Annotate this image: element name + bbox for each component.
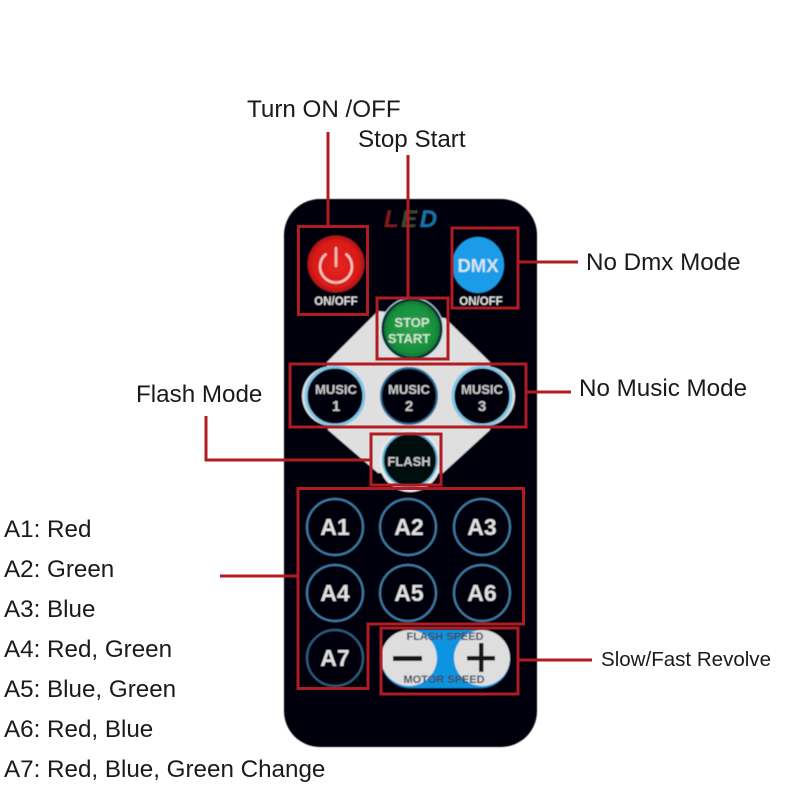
LED logo: LED — [384, 206, 440, 233]
A1 — [307, 499, 363, 555]
A4: A4 — [320, 580, 350, 606]
label: no music mode: No Music Mode — [579, 375, 747, 402]
flash button: FLASH — [387, 454, 431, 469]
A7 — [307, 630, 363, 686]
label: no dmx mode: No Dmx Mode — [586, 249, 741, 276]
A2 — [380, 499, 436, 555]
music 3 — [453, 367, 511, 425]
color legend — [4, 516, 325, 783]
power button: ON/OFF — [314, 296, 358, 308]
DMX button: ON/OFF — [459, 296, 503, 308]
flash button — [383, 433, 437, 487]
label: flash mode: Flash Mode — [136, 381, 262, 408]
music 2 — [381, 368, 437, 424]
power button — [308, 236, 364, 308]
stop start button: START — [388, 331, 430, 346]
speed highlight and leader — [381, 628, 592, 694]
power highlight and leader — [298, 132, 368, 314]
stop start button: STOP — [394, 315, 430, 330]
music 2: MUSIC — [388, 382, 431, 397]
speed control — [381, 630, 510, 688]
A6: A6 — [467, 580, 497, 606]
label: turn on off: Turn ON /OFF — [247, 96, 401, 123]
A5 legend: A5: Blue, Green — [4, 676, 176, 703]
label: stop start: Stop Start — [358, 126, 466, 153]
speed control: MOTOR SPEED — [403, 674, 485, 686]
music buttons — [306, 367, 511, 425]
stop start highlight and leader — [377, 155, 448, 359]
A2 legend: A2: Green — [4, 556, 114, 583]
red highlight boxes and leader lines — [206, 132, 592, 694]
color buttons A1 to A7 — [307, 499, 510, 686]
A3 — [454, 499, 510, 555]
A7 legend: A7: Red, Blue, Green Change — [4, 756, 325, 783]
A3 legend: A3: Blue — [4, 596, 95, 623]
speed control: FLASH SPEED — [406, 631, 484, 643]
DMX button: DMX — [457, 255, 499, 276]
A4 legend: A4: Red, Green — [4, 636, 172, 663]
A5: A5 — [394, 580, 424, 606]
music 2: 2 — [405, 398, 413, 415]
music highlight and leader — [290, 364, 571, 427]
white diamond panel — [302, 311, 515, 492]
A2: A2 — [394, 514, 424, 540]
A5 — [380, 565, 436, 621]
A4 — [307, 565, 363, 621]
music 3: 3 — [478, 398, 486, 415]
flash highlight and leader — [206, 416, 441, 485]
music 1: 1 — [332, 398, 340, 415]
label: slow fast revolve: Slow/Fast Revolve — [601, 648, 771, 671]
DMX highlight and leader — [452, 228, 578, 308]
music 1 — [306, 367, 364, 425]
DMX button — [452, 237, 504, 308]
remote control body — [284, 199, 537, 747]
music 1: MUSIC — [315, 382, 358, 397]
color buttons highlight and leader — [220, 488, 524, 688]
A6 — [454, 565, 510, 621]
A1: A1 — [320, 514, 350, 540]
A6 legend: A6: Red, Blue — [4, 716, 153, 743]
stop start button — [381, 298, 443, 360]
A3: A3 — [467, 514, 497, 540]
A7: A7 — [320, 645, 350, 671]
music 3: MUSIC — [461, 382, 504, 397]
A1 legend: A1: Red — [4, 516, 91, 543]
